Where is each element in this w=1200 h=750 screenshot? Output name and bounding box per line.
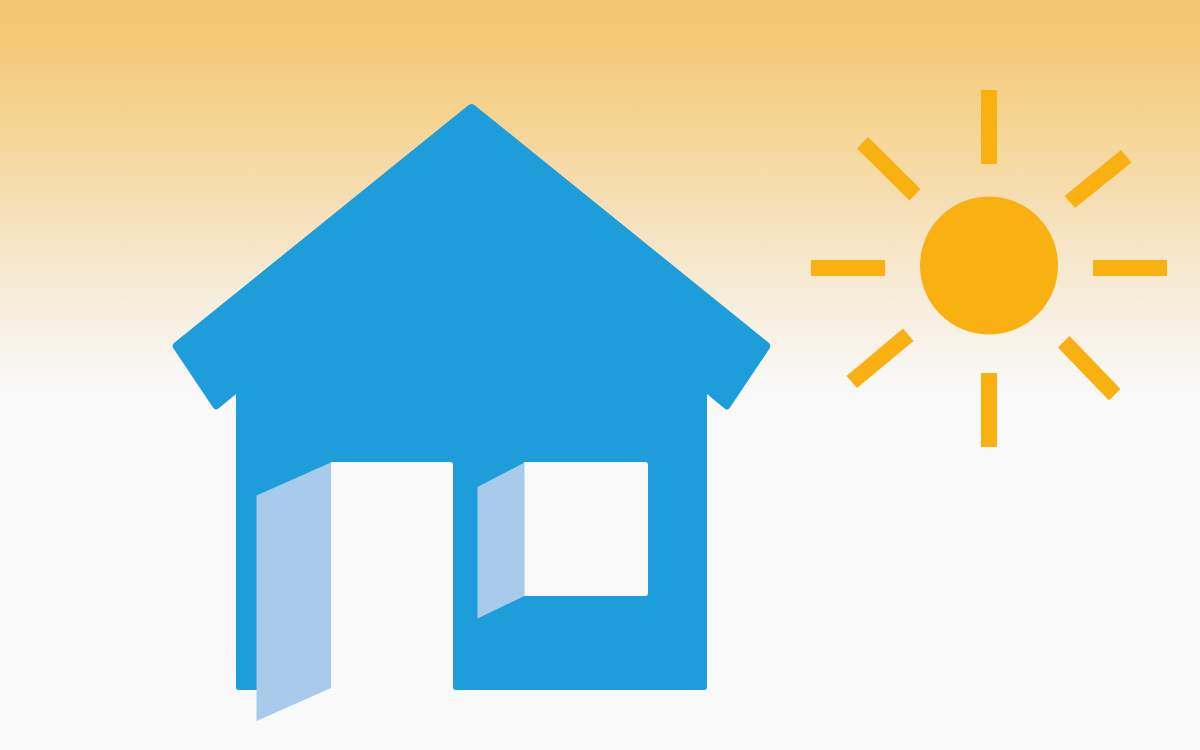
icon: open window shutter <box>478 462 524 618</box>
sun rays <box>811 90 1167 447</box>
icon: open door leaf <box>256 462 331 721</box>
background sky gradient <box>0 0 1200 392</box>
window opening <box>524 462 648 596</box>
icon: sun <box>811 90 1167 447</box>
sun disc <box>920 196 1058 334</box>
icon: house body and roof <box>173 104 770 690</box>
